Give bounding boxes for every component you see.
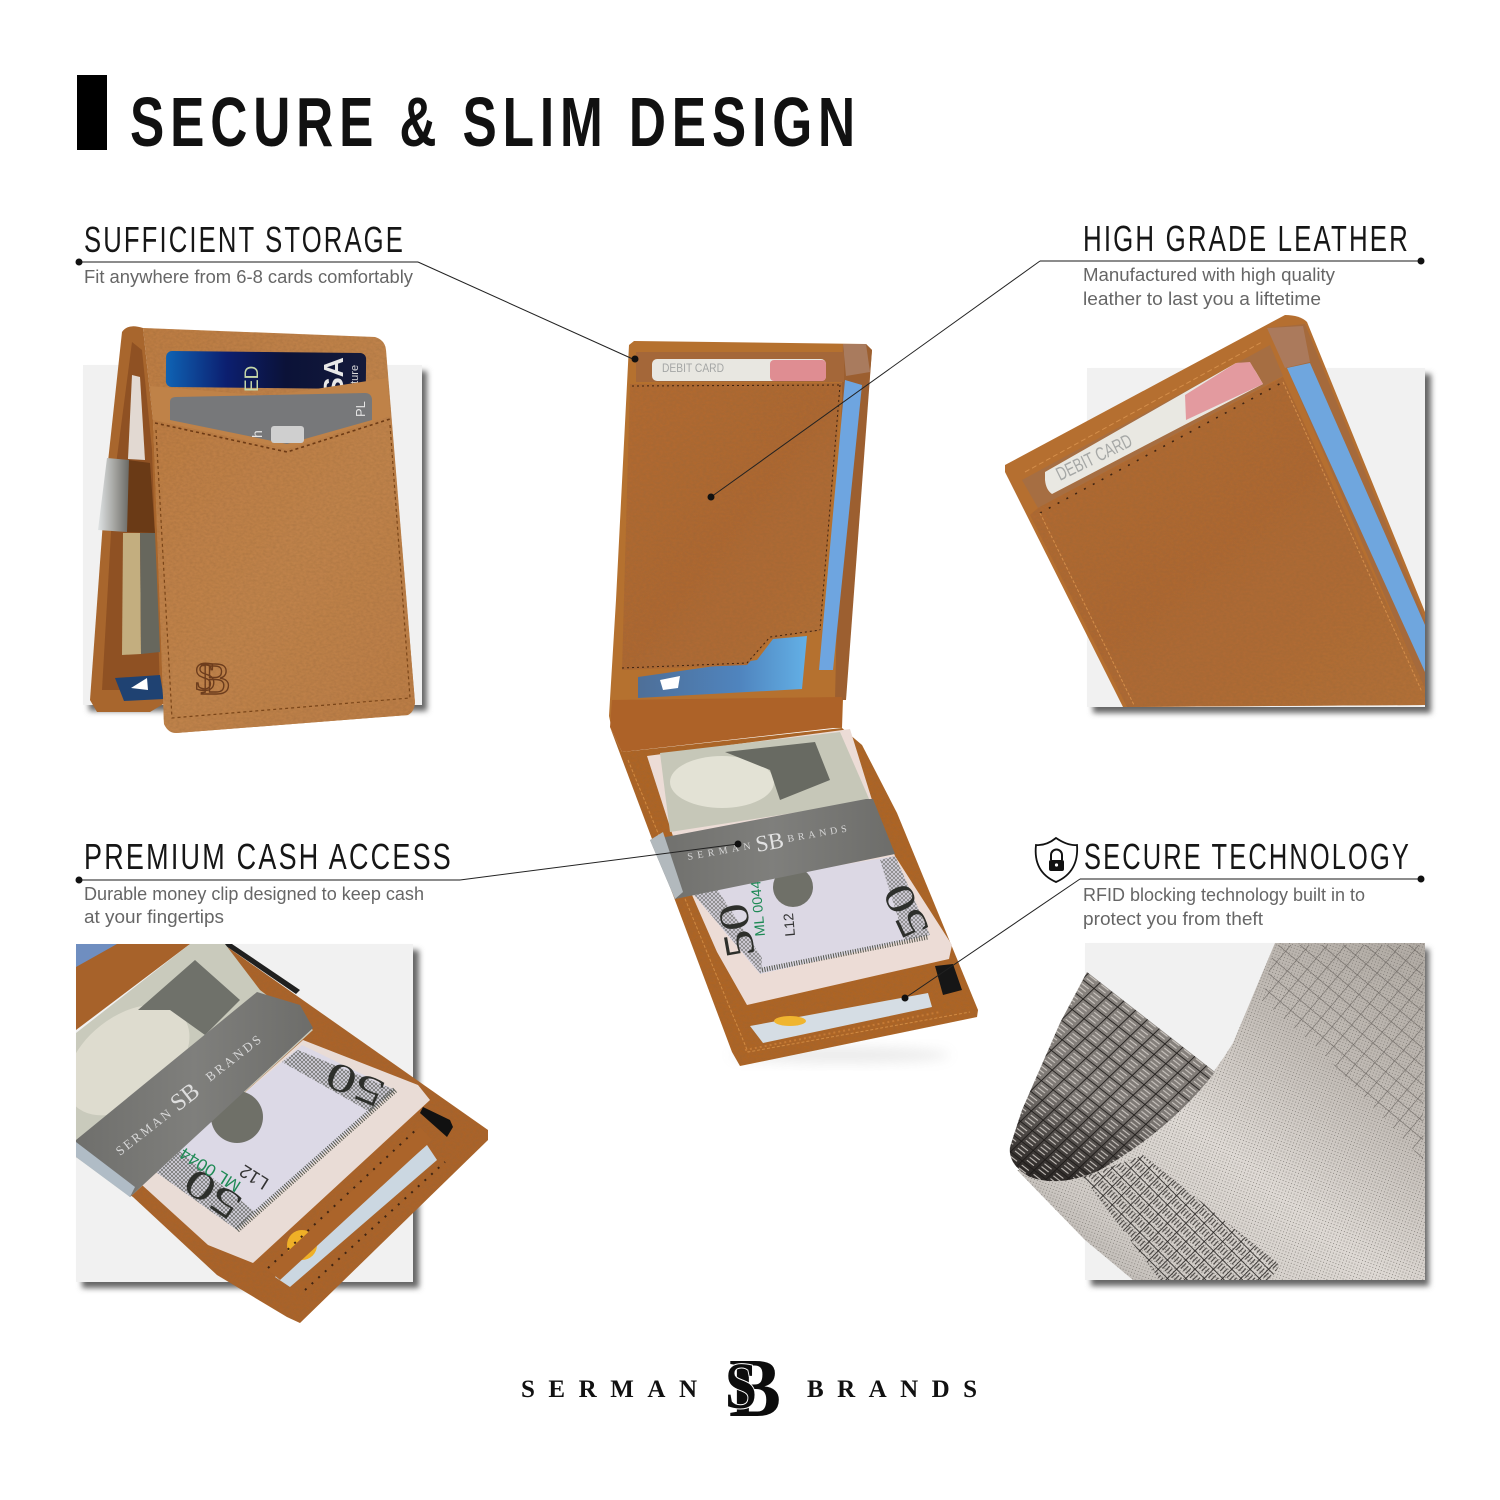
lower wallet panel [610,727,978,1066]
center wallet: ML 0044 [747,880,768,937]
callout: premium cash access: PREMIUM CASH ACCESS [84,836,453,877]
icon: stack of cash [142,1040,430,1263]
icon: money clip: SERMAN [113,1106,174,1158]
callout: secure technology [902,836,1424,1002]
callout: premium cash access: Durable money clip designed to keep cash [84,884,424,904]
callout: high grade leather [708,218,1424,500]
icon: embossed logo: B [200,653,231,704]
icon: black and silver cards in pocket [935,964,962,995]
panel: premium cash access photo: 50 [176,1159,250,1229]
icon: money clip [650,799,895,899]
icon: stack of bills [647,729,952,1005]
callout: secure technology: RFID blocking technology built in to [1083,885,1365,905]
callout: premium cash access: at your fingertips [84,907,224,927]
icon: back panel of wallet [90,326,165,712]
center wallet [609,341,978,1066]
callout: high grade leather: Manufactured with high quality [1083,265,1335,285]
icon: debit card [652,359,826,381]
upper wallet panel: DEBIT CARD [662,361,724,375]
panel: premium cash access photo: 50 [319,1052,392,1116]
panel: sufficient storage photo: SA [318,357,349,396]
icon: debit card [1045,363,1263,494]
panel: high grade leather photo: DEBIT CARD [1053,431,1136,485]
icon: lower half of bill [690,856,930,974]
icon: front of wallet [143,328,415,733]
upper wallet panel [609,341,872,752]
brand logo: BRANDS [807,1376,977,1403]
callout: sufficient storage: SUFFICIENT STORAGE [84,219,405,260]
icon: folded bills and portrait [76,944,313,1197]
icon: dark curled mesh flap [1010,972,1215,1181]
icon: SB monogram: S [725,1350,757,1423]
icon: lower blue card [638,636,807,698]
icon: money clip [76,992,313,1197]
panel: sufficient storage photo: ature [349,365,361,390]
icon: card and pocket [420,1107,453,1137]
icon: SB monogram: B [729,1342,781,1435]
icon: money clip: BRANDS [203,1032,264,1084]
panel: sufficient storage photo: ED [242,366,263,392]
icon: wallet body [76,944,488,1323]
icon: shield with padlock [1036,838,1077,882]
panel: sufficient storage photo: PL [353,401,368,417]
brand logo [521,1342,977,1435]
callout: sufficient storage [76,219,638,362]
panel: high grade leather photo [1005,315,1431,713]
pocket leather [622,383,842,670]
panel: premium cash access photo: ML 0044 [176,1144,244,1196]
panel: premium cash access photo: L12 [236,1161,272,1194]
center wallet: L12 [780,912,798,937]
panel: secure technology photo [1010,943,1429,1286]
panel: sufficient storage photo: h [249,430,265,438]
icon: RFID mesh sheet [1017,943,1425,1280]
brand logo: SERMAN [521,1376,697,1403]
title [77,75,861,161]
center wallet: 50 [873,877,939,946]
icon: money clip: BRANDS [787,824,848,845]
icon: money clip: SB [754,827,786,857]
icon: zoomed leather wallet corner [1005,315,1425,707]
callout: sufficient storage: Fit anywhere from 6-8 cards comfortably [84,267,413,287]
panel: premium cash access photo [46,944,488,1323]
callout: premium cash access [76,836,742,927]
icon: embossed logo: S [194,654,216,699]
panel: sufficient storage photo [83,326,427,733]
center wallet: 50 [709,900,764,961]
icon: money clip: SB [166,1078,205,1117]
title: SECURE & SLIM DESIGN [130,83,861,161]
callout: high grade leather: leather to last you a liftetime [1083,289,1321,309]
callout: secure technology: protect you from theft [1083,909,1263,929]
icon: money clip: SERMAN [687,841,752,863]
icon: portrait on bill [660,732,870,832]
